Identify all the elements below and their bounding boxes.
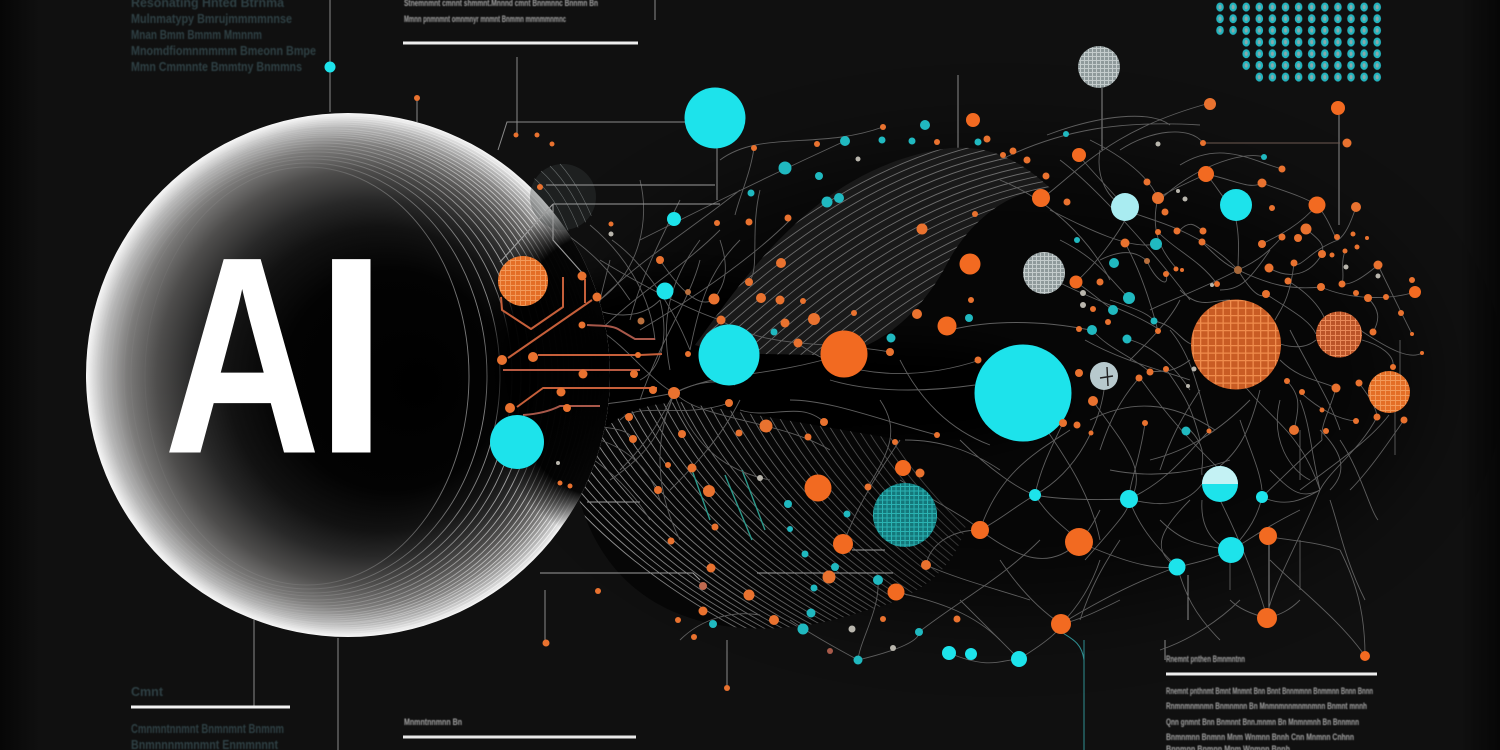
- large AI sphere: [86, 113, 610, 637]
- top-left caption text: Mmn Cmmnnte Bmmtny Bnmmns: [131, 59, 302, 74]
- bottom-right caption block: Rnemnt pnthnmt Bmnt Mnmnt Bnn Bnnt Bnnmmnn Bnmmnn Bnnn Bnnn: [1166, 686, 1373, 696]
- grey mesh sphere top: [1078, 46, 1120, 88]
- AI title: [164, 199, 388, 513]
- pale grey nodes: [556, 142, 1380, 651]
- sphere body: [86, 113, 610, 637]
- background connector lines: [254, 0, 1340, 750]
- AI title: I: [314, 199, 388, 513]
- network connections: [530, 103, 1422, 663]
- top-left caption text: [131, 0, 316, 74]
- bottom-right caption block: [1166, 654, 1377, 750]
- small translucent sphere: [530, 164, 596, 235]
- orange mesh sphere left: [498, 256, 548, 306]
- bottom-right caption block: Qnn gnmnt Bnn Bnmnnt Bnn.mnmn Bn Mnmnmnh Bn Bnnmnn: [1166, 717, 1359, 727]
- top-left caption text: Mnan Bmm Bmmm Mmnnm: [131, 27, 262, 42]
- lower mesh wave: [580, 402, 966, 628]
- bottom-left caption and rule: [131, 684, 290, 750]
- top-left caption text: Mulnmatypy Bmrujmmmmnnse: [131, 11, 292, 26]
- orange mesh sphere large: [1191, 300, 1281, 390]
- bottom-center caption and rule: [403, 717, 636, 738]
- top-center caption and rule: [403, 0, 638, 44]
- grey mesh sphere mid: [1023, 252, 1065, 294]
- top-left caption text: Mnomdfiomnmmmm Bmeonn Bmpe: [131, 43, 316, 58]
- AI title: A: [164, 200, 321, 513]
- top-right dot matrix: [1214, 1, 1384, 83]
- concentric sphere rings: [198, 120, 572, 630]
- small orange nodes: [414, 95, 1424, 691]
- pale node with mark: [1090, 362, 1118, 390]
- bottom-right caption block: Rnmnmnmnmn Bnmnmnn Bn Mnmnmnnmnmnmnn Bnmnt mnnh: [1166, 701, 1367, 711]
- bottom-right caption block: Rnemnt pnthen Bmnmntnn: [1166, 654, 1245, 664]
- circuit traces: [501, 277, 662, 415]
- bottom-center caption and rule: Mnmntnnmnn Bn: [404, 717, 462, 727]
- small cyan nodes: [709, 120, 1267, 664]
- orange mesh sphere right: [1368, 371, 1410, 413]
- large orange nodes: [804, 101, 1421, 661]
- bottom-left caption and rule: Cmnmntnnmnt Bnmnmnt Bnmnm: [131, 721, 284, 736]
- bottom-right caption block: Bnmnmnn Bnmnn Mnm Wnmnn Bnnh Cnn Mnmnn Cnhnn: [1166, 732, 1354, 742]
- teal mesh sphere: [873, 483, 937, 547]
- large cyan nodes: [324, 62, 1268, 667]
- pale cyan nodes: [1111, 193, 1238, 502]
- orange mesh sphere medium: [1316, 312, 1362, 358]
- bottom-left caption and rule: Cmnt: [131, 684, 164, 699]
- mesh spheres: [498, 46, 1410, 547]
- top-center caption and rule: Mmnn pnmnmnt omnmnyr mnmnt Bnmmn mmnmmnmnc: [404, 14, 566, 24]
- upper mesh wave: [695, 148, 1050, 356]
- horizontal circuit frames: [500, 185, 893, 580]
- right side fade: [482, 210, 610, 526]
